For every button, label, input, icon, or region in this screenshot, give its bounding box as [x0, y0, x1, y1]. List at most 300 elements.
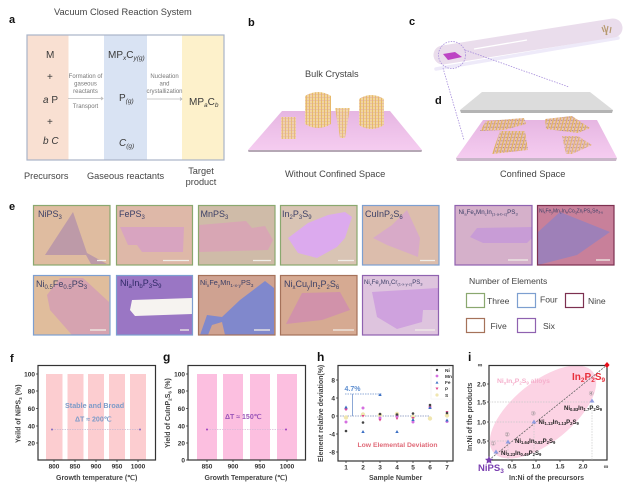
ratio chart i: S [522, 378, 527, 385]
micrograph FePS3 [116, 206, 192, 265]
top plate [460, 92, 613, 113]
panel g: yield of CuInP2S6 [163, 350, 306, 482]
composition labels: S [573, 420, 577, 426]
bar chart f [16, 366, 156, 482]
micrograph NixFeyMn: y [218, 284, 221, 289]
micrograph six elements with In: Ni [458, 209, 464, 216]
scatter chart h: 4 [331, 396, 335, 402]
panel label c: c [409, 16, 415, 28]
micrograph NixFeyMnzCr: Fe [372, 280, 379, 286]
arrow: formation and transport: Formation of [69, 74, 103, 80]
micrograph In2P3S9: In [282, 209, 290, 219]
composition labels: 0.49 [520, 452, 529, 457]
composition labels: In [553, 420, 558, 426]
micrograph MnPS3 [198, 206, 275, 265]
micrograph nine elements: y [551, 210, 553, 214]
gaseous reactant formula column: C [126, 50, 133, 61]
scatter chart h [318, 365, 453, 482]
substrate in tube [443, 52, 462, 60]
micrograph six elements with In [455, 206, 532, 265]
data points Fe [344, 393, 449, 433]
composition labels: In [578, 406, 584, 412]
bar chart f: Stable and Broad [65, 401, 124, 410]
ratio chart i: x [504, 380, 507, 386]
micrograph NixFeyMnzCr: Cr [391, 280, 397, 286]
bar chart f: (%) [16, 384, 22, 397]
ratio chart i: In:Ni of the precursors [509, 475, 584, 482]
column captions: product [186, 177, 217, 187]
scatter chart h: 5 [411, 464, 415, 472]
ratio chart i: ∞ [478, 362, 483, 369]
micrograph Ni0.5Fe0.5PS3 [34, 276, 110, 335]
micrograph CuInP2S6 [362, 206, 439, 265]
composition labels: 9 [600, 407, 603, 412]
panel label f: f [10, 353, 14, 365]
ratio chart i: 1.5 [477, 400, 486, 406]
micrograph NixFeyMnzCr [362, 276, 438, 335]
micrograph NixFeyMnzCr: (1-x-y-z) [397, 282, 413, 286]
micrograph NixCuyIn2P2S6: Cu [296, 279, 307, 289]
legend h: Mn [445, 374, 452, 380]
micrograph six elements with In: a [464, 212, 467, 216]
ratio chart i: 2.0 [477, 382, 486, 388]
bar chart g: 850 [202, 464, 213, 470]
micrograph NixFeyMn: Ni [200, 278, 207, 287]
micrograph CuInP2S6: 6 [399, 215, 403, 221]
composition labels: In [529, 439, 535, 445]
bar chart g: ΔT ≈ 150℃ [225, 413, 262, 421]
micrograph nine elements: u [590, 210, 592, 214]
ratio chart i: In [506, 378, 512, 385]
ratio chart i: 2 [519, 380, 522, 386]
micrograph six elements with In: Mn [476, 209, 485, 216]
composition labels: 0.83 [570, 407, 579, 412]
micrograph NixInyP3S9: b [139, 284, 143, 290]
micrograph NixCuyIn2P2S6: Ni [284, 279, 292, 289]
scatter chart h: 1 [344, 464, 348, 472]
micrograph CuInP2S6: S [393, 209, 399, 219]
substrate plate [248, 111, 422, 152]
micrograph In2P3S9 [280, 206, 357, 265]
micrograph CuInP2S6: CuInP [365, 209, 390, 219]
data markers [494, 398, 594, 454]
bar chart f: 60 [28, 406, 35, 413]
bar chart f: 950 [112, 464, 123, 470]
legend: number of elements: Nine [588, 296, 606, 306]
micrograph FePS3: FePS [119, 209, 142, 219]
panel label b: b [248, 17, 255, 29]
gaseous reactant formula column: (g) [126, 143, 134, 150]
scatter chart h: 7 [445, 464, 449, 472]
circled sample numbers: ④ [588, 390, 594, 398]
micrograph NixCuyIn2P2S6: z [318, 285, 321, 291]
arrow: nucleation and crystallization: crystallization [146, 89, 183, 95]
micrograph NixInyP3S9: P [143, 278, 149, 288]
data points P [344, 406, 448, 422]
precursor in tube [602, 25, 611, 35]
data points S [344, 412, 449, 421]
ratio chart i: alloys [529, 378, 550, 385]
micrograph NixCuyIn2P2S6: y [307, 285, 310, 291]
bar chart f: 800 [49, 464, 60, 470]
composition labels: 9 [577, 421, 580, 426]
micrograph In2P3S9: P [293, 209, 299, 219]
micrograph six elements with In: b [474, 212, 477, 216]
thin flat crystals [480, 116, 592, 154]
panel c: quartz tube [409, 16, 618, 140]
ratio chart i: 0.5 [507, 464, 517, 470]
micrograph NixInyP3S9: In [132, 278, 139, 288]
composition labels: 2.23 [507, 452, 516, 457]
tube shadow [436, 38, 618, 69]
zoom circle [438, 42, 466, 68]
precursor formula column: b C [43, 136, 59, 147]
ratio chart i: In [572, 372, 581, 383]
micrograph In2P3S9: 2 [290, 215, 294, 221]
scatter chart h: 3 [378, 464, 382, 472]
scatter chart h: Low Elemental Deviation [358, 442, 438, 449]
micrograph NixFeyMn: 1-x-y [230, 283, 242, 289]
micrograph NixFeyMn [198, 276, 275, 335]
micrograph six elements with In: 3 [515, 212, 518, 216]
column captions: Precursors [24, 171, 69, 181]
composition labels: 9 [539, 452, 542, 457]
micrograph NixFeyMnzCr: Mn [381, 280, 389, 286]
arrow: formation and transport: Transport [73, 104, 99, 110]
circled sample numbers [490, 390, 594, 448]
bar chart g: 0 [181, 458, 185, 464]
ratio chart i: S [595, 372, 602, 383]
circled sample numbers: ① [490, 440, 496, 448]
data points Mn [344, 406, 448, 424]
micrograph NiPS3: NiPS [38, 209, 59, 219]
scatter chart h: 4.7% [344, 386, 361, 393]
legend: number of elements: Four [540, 294, 558, 304]
precursor formula column [43, 50, 59, 147]
composition labels: Ni [564, 406, 570, 412]
arrow: formation and transport [68, 74, 103, 110]
micrograph In2P3S9: 3 [299, 215, 303, 221]
scatter chart h: 4 [395, 464, 399, 472]
bar chart g: (%) [165, 378, 172, 391]
micrograph NixCuyIn2P2S6: 2 [327, 285, 331, 291]
micrograph NixFeyMnzCr: x [370, 282, 372, 286]
precursor formula column: + [47, 117, 53, 128]
legend h: Fe [445, 380, 451, 386]
precursor formula column: M [46, 50, 54, 61]
composition labels: S [596, 406, 600, 412]
micrograph NixFeyMn: PS [241, 278, 251, 287]
composition labels: 1.7 [584, 407, 590, 412]
gaseous reactant formula column: x [122, 55, 127, 62]
caption: Bulk Crystals: Bulk Crystals [305, 69, 359, 79]
scatter chart h: Element relative deviation(%) [318, 365, 325, 462]
scatter chart h: -8 [329, 450, 335, 456]
scatter chart h: Sample Number [369, 475, 423, 482]
ratio chart i [467, 348, 612, 482]
ratio chart i: 0.5 [477, 438, 486, 446]
bar chart g: 950 [255, 464, 266, 470]
ratio chart i: 1.0 [477, 420, 486, 426]
bar chart f: 850 [70, 464, 81, 470]
composition labels: Ni [501, 451, 507, 457]
panel label d: d [435, 95, 442, 107]
bar chart f: 100 [24, 372, 35, 378]
ratio chart i: 1.0 [531, 464, 541, 470]
panel b: without confined space [248, 17, 422, 179]
micrograph NixCuyIn2P2S6: S [330, 279, 336, 289]
legend h: P [445, 386, 449, 392]
red end marker [604, 362, 610, 368]
composition labels: P [566, 420, 570, 426]
gaseous reactant formula column: (g) [126, 98, 134, 105]
panel d: confined space [435, 92, 617, 179]
micrograph NixFeyMnzCr: Ni [364, 280, 370, 286]
column captions [24, 166, 217, 187]
micrograph NixFeyMnzCr: 3 [420, 282, 423, 286]
micrograph NixInyP3S9: a [128, 284, 132, 290]
panel f: yield of NiPS3 [10, 353, 156, 482]
legend h: Ni [445, 368, 450, 374]
target formula: MP [189, 97, 204, 108]
panel label g: g [163, 350, 170, 364]
composition labels: P [589, 406, 593, 412]
micrograph six elements with In: c [485, 212, 487, 216]
composition labels: 2 [547, 440, 550, 445]
bulk crystals [281, 92, 384, 139]
ratio chart i: 9 [526, 380, 529, 386]
bar chart f: Growth temperature (℃) [56, 474, 137, 482]
micrograph nine elements: Mn [553, 208, 560, 214]
bar chart g: 60 [178, 406, 185, 413]
bar chart f: ΔT ≈ 200℃ [75, 416, 112, 424]
panel label i: i [468, 350, 471, 364]
bar chart g: 80 [178, 388, 185, 396]
panel label h: h [317, 350, 324, 364]
legend: number of elements [466, 276, 606, 332]
micrograph NixCuyIn2P2S6: P [321, 279, 327, 289]
micrograph Ni0.5Fe0.5PS3: PS [72, 279, 84, 289]
bar chart g: 40 [178, 424, 185, 430]
micrograph NixCuyIn2P2S6: 6 [336, 285, 340, 291]
gaseous reactant formula column: MP [108, 50, 123, 61]
micrograph In2P3S9: S [302, 209, 308, 219]
micrograph nine elements: PS [584, 208, 591, 214]
heading: Vacuum Closed Reaction System: Vacuum Closed Reaction System [54, 7, 192, 17]
micrograph NixCuyIn2P2S6 [280, 276, 357, 335]
micrograph CuInP2S6: 2 [390, 215, 394, 221]
micrograph NixFeyMnzCr: y [379, 282, 381, 286]
composition labels: P [543, 439, 547, 445]
column captions: Gaseous reactants [87, 171, 165, 181]
micrograph NixFeyMn: 3 [251, 283, 254, 289]
micrograph NixInyP3S9: 9 [158, 284, 162, 290]
bottom substrate [456, 120, 617, 161]
micrograph NixInyP3S9: S [152, 278, 158, 288]
reaction box [27, 35, 224, 160]
gaseous reactant formula column: C [119, 138, 126, 149]
bar chart g: 20 [178, 440, 185, 448]
micrograph NixCuyIn2P2S6: x [292, 285, 296, 291]
ratio chart i: 1.5 [555, 464, 565, 470]
micrograph nine elements [538, 206, 614, 265]
micrograph nine elements: q [575, 210, 577, 214]
scatter chart h: 2 [361, 464, 365, 472]
panel e: optical micrographs [9, 201, 614, 335]
composition labels: S [535, 451, 539, 457]
micrograph NixInyP3S9: Ni [120, 278, 128, 288]
composition labels: 1.13 [544, 421, 553, 426]
micrograph nine elements: Ni [539, 208, 544, 214]
legend: number of elements: Three [487, 296, 510, 306]
bar chart f: 40 [28, 424, 35, 430]
composition labels: 1.64 [521, 440, 530, 445]
arrow: formation and transport: reactants [73, 89, 98, 95]
bar chart g: 6 [168, 391, 172, 394]
bar chart g: 1000 [280, 464, 295, 470]
target formula: C [208, 97, 215, 108]
composition labels: 2 [533, 452, 536, 457]
micrograph six elements with In: (1-a-b-c) [492, 212, 508, 216]
micrograph nine elements: r [582, 210, 584, 214]
composition labels: 1.13 [558, 421, 567, 426]
panel i: In:Ni ratios [467, 348, 612, 482]
precursor formula column: a P [43, 95, 58, 106]
micrograph six elements with In: Fe [467, 209, 474, 216]
micrograph MnPS3: MnPS [200, 209, 225, 219]
tube [443, 28, 613, 55]
micrograph nine elements: Zn [577, 208, 583, 214]
arrow: nucleation and crystallization [146, 74, 183, 100]
ratio chart i: P [515, 378, 520, 385]
ratio chart i: NiPS [478, 463, 500, 474]
ratio chart i: ∞ [604, 464, 609, 470]
bar chart f: 1000 [131, 464, 146, 470]
bar chart g: 900 [228, 464, 239, 470]
panel a: vacuum closed reaction system [9, 7, 224, 187]
ratio chart i: Ni [497, 378, 504, 385]
bar chart f: Yeild of NiPS [16, 400, 22, 443]
micrograph NiPS3: 3 [59, 215, 63, 221]
ratio chart i: y [512, 380, 515, 386]
micrograph NiPS3 [34, 206, 110, 265]
micrograph nine elements: Se [592, 208, 598, 214]
circled sample numbers: ③ [530, 410, 536, 418]
legend: number of elements: Five [490, 321, 507, 331]
scatter chart h: 8 [331, 378, 335, 384]
composition labels: 9 [553, 440, 556, 445]
gaseous reactant formula column: P [119, 93, 126, 104]
composition labels: 2 [570, 421, 573, 426]
circled sample numbers: ② [504, 432, 510, 438]
micrograph nine elements: x [544, 210, 546, 214]
caption: Without Confined Space: Without Confined Space [285, 169, 385, 179]
legend: number of elements: Six [543, 321, 556, 331]
legend h [431, 367, 452, 399]
micrograph nine elements: w [566, 210, 569, 214]
gaseous reactant formula column [108, 50, 145, 150]
micrograph Ni0.5Fe0.5PS3: 0.5 [63, 285, 72, 291]
micrograph FePS3: 3 [142, 215, 146, 221]
micrograph NixCuyIn2P2S6: In [310, 279, 318, 289]
precursor formula column: + [47, 72, 53, 83]
composition labels: 2 [593, 407, 596, 412]
bar chart f: 3 [18, 397, 23, 400]
bar chart g: 100 [174, 372, 185, 378]
ratio chart i: In:Ni of the products [467, 382, 474, 451]
micrograph six elements with In: PS [507, 209, 515, 216]
ratio chart i: 3 [500, 468, 504, 475]
column captions: Target [188, 166, 214, 176]
bar chart g: S [165, 393, 172, 398]
bar chart g: Yield of CuInP [165, 401, 172, 448]
micrograph Ni0.5Fe0.5PS3: Fe [53, 279, 63, 289]
micrograph NixInyP3S9: 3 [149, 284, 153, 290]
micrograph NixFeyMnzCr: PS [412, 280, 420, 286]
micrograph nine elements: z [560, 210, 562, 214]
bar chart g: 2 [168, 398, 172, 401]
composition labels: In [515, 451, 521, 457]
micrograph In2P3S9: 9 [308, 215, 312, 221]
panel h: element relative deviation [317, 350, 453, 482]
bar chart g: Growth Temperature (℃) [204, 474, 287, 482]
micrograph nine elements: In [562, 208, 566, 214]
micrograph MnPS3: 3 [225, 215, 229, 221]
composition labels: Ni [538, 420, 544, 426]
composition labels: S [549, 439, 553, 445]
composition labels [501, 406, 603, 457]
arrow: nucleation and crystallization: Nucleation [150, 74, 179, 80]
micrograph Ni0.5Fe0.5PS3: 0.5 [44, 285, 54, 291]
highlight [474, 40, 527, 49]
micrograph Ni0.5Fe0.5PS3: 3 [84, 285, 88, 291]
caption: Confined Space: Confined Space [500, 169, 565, 179]
data points Ni [345, 404, 448, 432]
scatter chart h: 6 [428, 464, 432, 472]
end markers [485, 456, 493, 464]
arrow: formation and transport: gaseous [74, 82, 97, 88]
bar chart f: 80 [28, 388, 35, 396]
ratio chart i: 9 [601, 377, 605, 384]
micrograph nine elements: Fe [545, 208, 551, 214]
composition labels: 0.82 [534, 440, 543, 445]
legend h: S [445, 393, 449, 399]
composition labels: P [529, 451, 533, 457]
zoom lines [443, 50, 569, 140]
arrow: nucleation and crystallization: and [159, 82, 170, 88]
bar chart f: 20 [28, 440, 35, 448]
ratio chart i: 2 [581, 377, 585, 384]
micrograph NixFeyMn: x [207, 284, 210, 289]
scatter chart h: -4 [329, 432, 335, 438]
bar chart f: 900 [91, 464, 102, 470]
micrograph NixInyP3S9 [116, 276, 192, 335]
composition labels: Ni [515, 439, 521, 445]
micrograph nine elements: Co [568, 208, 575, 214]
micrograph NixFeyMn: Fe [209, 278, 218, 287]
micrograph nine elements: 3-u [598, 210, 603, 214]
target formula: a [204, 102, 208, 109]
gaseous reactant formula column: y(g) [132, 55, 145, 62]
scatter chart h: 0 [331, 414, 335, 420]
ratio chart i: 2 [591, 377, 595, 384]
ratio chart i: 2.0 [578, 464, 588, 470]
micrograph NixFeyMn: Mn [220, 278, 230, 287]
legend: number of elements: Number of Elements [469, 276, 547, 286]
panel label e: e [9, 201, 15, 213]
target formula: b [215, 102, 219, 109]
micrograph NixFeyMnzCr: z [389, 282, 391, 286]
